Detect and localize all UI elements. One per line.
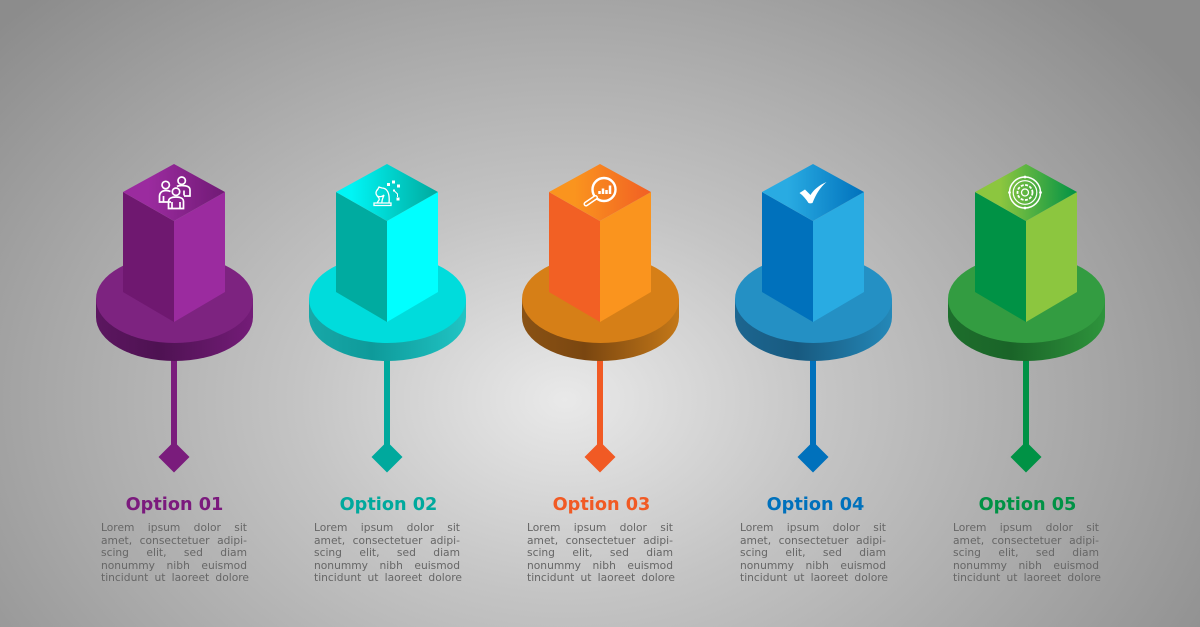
pin 3: orange (522, 164, 679, 472)
text block: Option 05: scing elit, sed diam (953, 546, 1099, 559)
text block: Option 04: amet, consectetuer adipi- (740, 534, 886, 546)
text block: Option 01: scing elit, sed diam (101, 546, 247, 559)
icon: target gear (1008, 176, 1042, 209)
icon: people (160, 177, 190, 208)
connector line 3 (597, 355, 603, 445)
heading: Option 01: Option 01 (126, 495, 223, 515)
text block: Option 04 (740, 521, 888, 584)
text block: Option 02: tincidunt ut laoreet dolore (314, 571, 462, 584)
isometric block 3 (549, 164, 651, 322)
disc 1 (96, 255, 253, 361)
heading: Option 05: Option 05 (979, 495, 1076, 515)
connector line 2 (384, 355, 390, 445)
text block: Option 02: Lorem ipsum dolor sit (314, 521, 460, 534)
heading: Option 02: Option 02 (340, 495, 437, 515)
text block: Option 05: tincidunt ut laoreet dolore (953, 571, 1101, 584)
icon: chess knight (374, 180, 400, 206)
pin 5: green (948, 164, 1105, 472)
text block: Option 02: scing elit, sed diam (314, 546, 460, 559)
disc 2 (309, 255, 466, 361)
icon: magnifier with bars (586, 178, 616, 204)
text block: Option 03: nonummy nibh euismod (527, 558, 673, 572)
text block: Option 04: tincidunt ut laoreet dolore (740, 571, 888, 584)
text block: Option 01: tincidunt ut laoreet dolore (101, 571, 249, 584)
text block: Option 05 (953, 521, 1101, 584)
text block: Option 03 (527, 521, 675, 584)
heading: Option 04: Option 04 (767, 495, 864, 515)
isometric block 5 (975, 164, 1077, 322)
disc 4 (735, 255, 892, 361)
isometric block 1 (123, 164, 225, 322)
text block: Option 02 (314, 521, 462, 584)
text block: Option 02: amet, consectetuer adipi- (314, 534, 460, 546)
disc 3 (522, 255, 679, 361)
connector line 5 (1023, 355, 1029, 445)
text block: Option 03: Lorem ipsum dolor sit (527, 521, 673, 534)
text block: Option 01: amet, consectetuer adipi- (101, 534, 247, 546)
text block: Option 03: tincidunt ut laoreet dolore (527, 571, 675, 584)
text block: Option 01: nonummy nibh euismod (101, 558, 247, 572)
text block: Option 05: amet, consectetuer adipi- (953, 534, 1099, 546)
connector line 4 (810, 355, 816, 445)
text block: Option 01: Lorem ipsum dolor sit (101, 521, 247, 534)
heading: Option 03: Option 03 (553, 495, 650, 515)
icon: check mark (800, 182, 826, 203)
diamond marker 3 (584, 442, 616, 472)
pin 2: teal (309, 164, 466, 472)
diamond marker 4 (798, 442, 828, 472)
text block: Option 05: Lorem ipsum dolor sit (953, 521, 1099, 534)
text block: Option 02: nonummy nibh euismod (314, 558, 460, 572)
diamond marker 5 (1010, 442, 1042, 472)
text block: Option 04: Lorem ipsum dolor sit (740, 521, 886, 534)
pin 4: blue (735, 164, 892, 472)
text block: Option 04: nonummy nibh euismod (740, 558, 886, 572)
text block: Option 03: scing elit, sed diam (527, 546, 673, 559)
disc 5 (948, 255, 1105, 361)
text block: Option 03: amet, consectetuer adipi- (527, 534, 673, 546)
isometric block 2 (336, 164, 438, 322)
isometric block 4 (762, 164, 864, 322)
pin 1: purple (96, 164, 253, 472)
text block: Option 04: scing elit, sed diam (740, 546, 886, 559)
diamond marker 2 (372, 442, 402, 472)
diamond marker 1 (158, 442, 190, 472)
text block: Option 01 (101, 521, 249, 584)
connector line 1 (171, 355, 177, 445)
text block: Option 05: nonummy nibh euismod (953, 558, 1099, 572)
